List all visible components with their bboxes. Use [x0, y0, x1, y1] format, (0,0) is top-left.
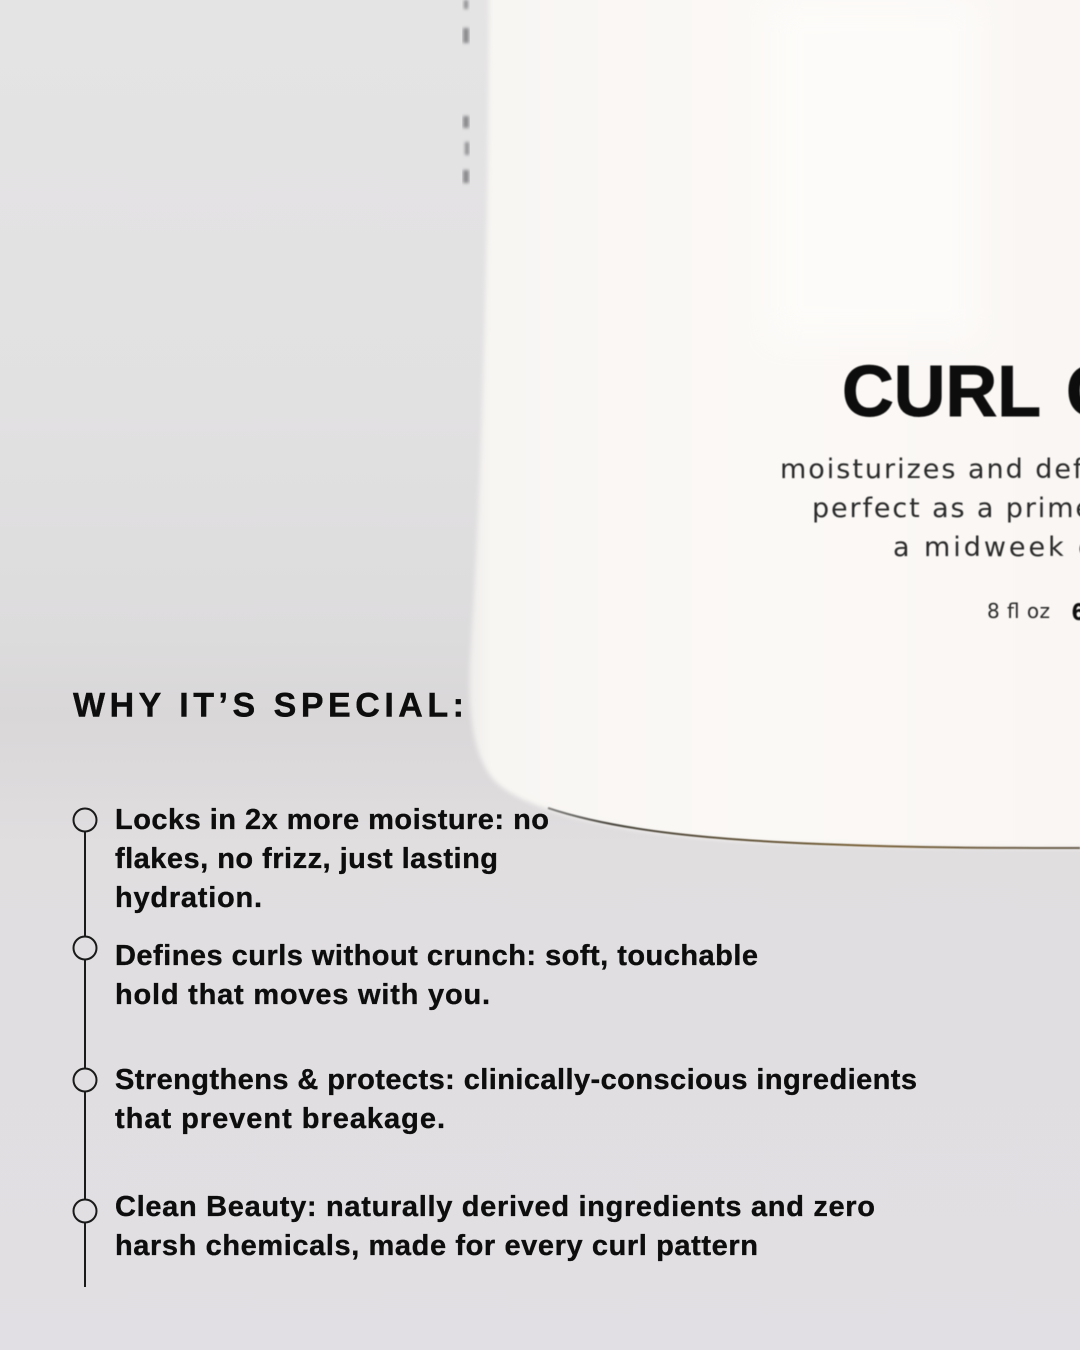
benefit 3: that prevent breakage. [115, 1103, 445, 1135]
timeline marker 4 [74, 1200, 96, 1222]
benefit 2: hold that moves with you. [115, 979, 490, 1011]
bottle label text: 8 fl oz [987, 599, 1050, 623]
benefit 1: flakes, no frizz, just lasting [115, 843, 498, 875]
timeline [74, 808, 96, 1287]
side label marks [463, 0, 469, 183]
bottle highlight [770, 0, 980, 340]
timeline marker 2 [74, 936, 96, 960]
benefit 2: Defines curls without crunch: soft, touchable [115, 940, 758, 972]
benefit 3 [115, 1064, 917, 1135]
benefit 4: Clean Beauty: naturally derived ingredients and zero [115, 1191, 875, 1223]
bottle label text: CURL [842, 352, 1041, 432]
benefit 1: Locks in 2x more moisture: no [115, 804, 549, 836]
bottle [463, 0, 1080, 848]
heading: WHY IT’S SPECIAL: [73, 686, 464, 724]
timeline marker 1 [74, 808, 96, 832]
benefit 2 [115, 940, 758, 1011]
benefit 1: hydration. [115, 882, 262, 914]
timeline marker 3 [74, 1068, 96, 1092]
benefit 3: Strengthens & protects: clinically-conscious ingredients [115, 1064, 917, 1096]
benefit 4 [115, 1191, 875, 1262]
bottle base edge line [548, 808, 1080, 848]
benefit 1 [115, 804, 549, 914]
bottle label text [780, 352, 1080, 626]
benefit 4: harsh chemicals, made for every curl pattern [115, 1230, 758, 1262]
